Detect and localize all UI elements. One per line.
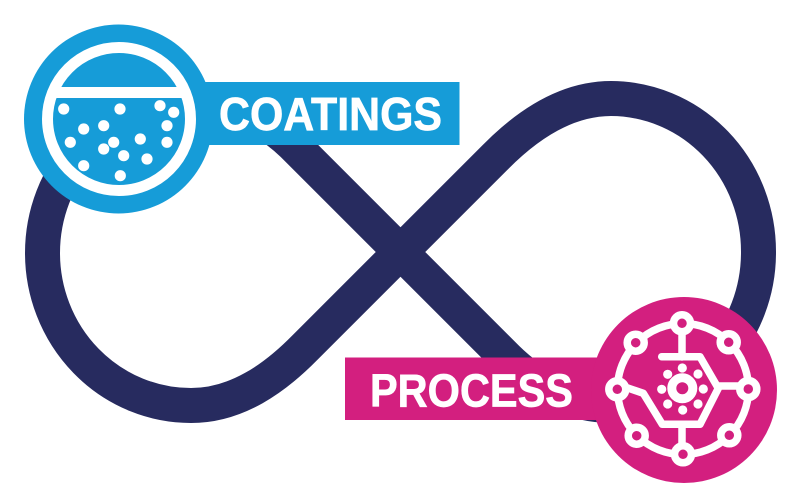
process circle	[591, 297, 777, 483]
icon: process network	[609, 315, 757, 463]
icon: coating layer over particles	[48, 48, 190, 190]
process badge	[345, 297, 777, 483]
coatings label bar	[190, 82, 460, 145]
coatings label: COATINGS	[219, 88, 442, 140]
process label bar	[345, 358, 610, 420]
coatings circle	[24, 24, 213, 214]
infinity loop	[42, 98, 759, 406]
coatings badge	[24, 24, 460, 214]
process label: PROCESS	[370, 364, 573, 416]
